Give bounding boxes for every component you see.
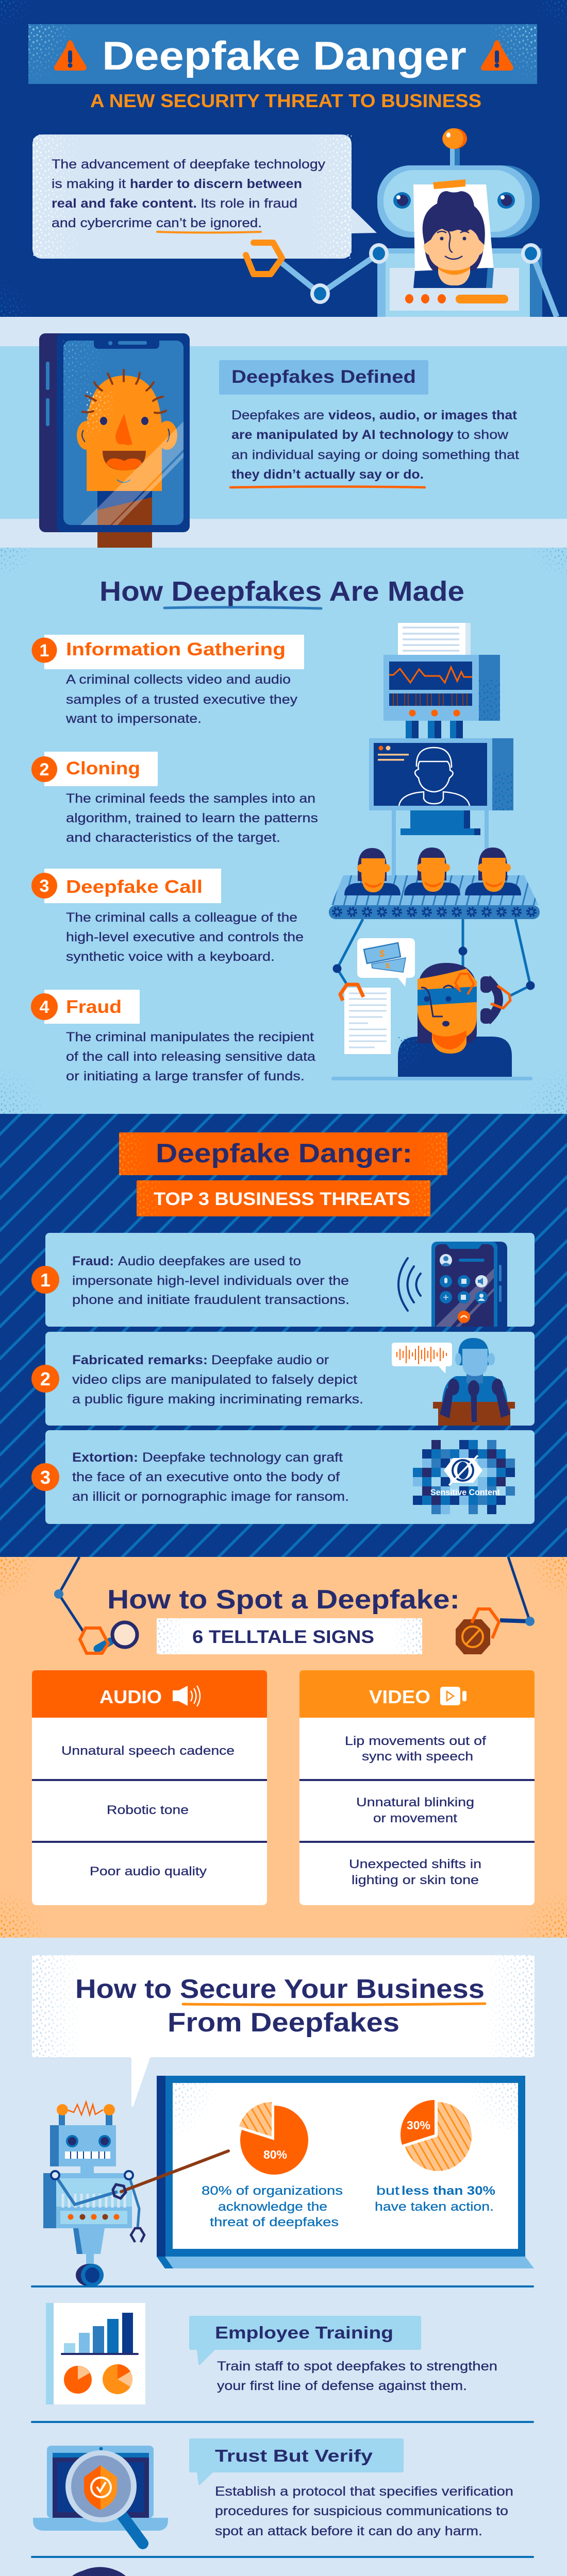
text: definition: to show [457, 428, 509, 442]
step 4: The criminal manipulates the recipient [66, 1030, 314, 1044]
step 2 [31, 752, 318, 845]
threat card: fraud: impersonate high-level individuals over the [72, 1274, 349, 1288]
stop arm [456, 1557, 535, 1654]
monitor with statistics [157, 2076, 534, 2268]
threat card: fraud [31, 1233, 535, 1327]
text: Train staff to spot deepfakes to strengthen [217, 2359, 497, 2374]
text [215, 2484, 513, 2538]
sub-heading box: 6 TELLTALE SIGNS [192, 1627, 374, 1647]
threat card: fabricated remarks: a public figure making incriminating remarks. [72, 1392, 363, 1406]
step 1: A criminal collects video and audio [66, 672, 291, 687]
threat card: extortion: 3 [40, 1467, 51, 1488]
audio header: AUDIO [99, 1686, 162, 1707]
step 1: want to impersonate. [65, 711, 202, 726]
step 1: samples of a trusted executive they [66, 692, 298, 707]
section: top 3 business threats [0, 1114, 567, 1557]
monitor: waveform [383, 655, 500, 721]
cables [406, 721, 463, 738]
text: definition [230, 408, 519, 487]
table: video: Unexpected shifts in [349, 1857, 481, 1871]
icon: censored pixels: Sensitive Content [430, 1487, 500, 1497]
text: definition: are manipulated by AI technology [231, 428, 454, 442]
step 1: 1 [40, 641, 49, 660]
step 4: 4 [40, 997, 49, 1017]
step 4: Fraud [66, 997, 122, 1017]
pie chart: 30 percent [401, 2100, 472, 2171]
item: trust but verify [33, 2438, 513, 2544]
heading: How to Spot a Deepfake: [107, 1585, 460, 1615]
step 1 [32, 635, 304, 726]
threat card: extortion: Deepfake technology can graft [142, 1450, 343, 1465]
cloned head 1 [344, 848, 401, 895]
step 4: of the call into releasing sensitive data [66, 1049, 315, 1064]
threat card: fabricated remarks: video clips are manipulated to falsely depict [72, 1372, 357, 1387]
cloned head 2 [404, 848, 460, 895]
title text: Deepfake Danger [102, 33, 466, 78]
sub-heading box [157, 1618, 422, 1654]
caption: 30 percent: have taken action. [375, 2200, 494, 2214]
threat card: fraud: Fraud: [72, 1254, 114, 1268]
caption: 80 percent: acknowledge the [218, 2200, 327, 2214]
speech bubble intro: harder to discern between [130, 177, 302, 191]
support column [392, 810, 489, 876]
heading bubble [189, 2438, 404, 2485]
section: how deepfakes are made [0, 548, 567, 1114]
caption: 30 percent: but [376, 2184, 399, 2198]
heading speech box: How to Secure Your Business [75, 1974, 485, 2004]
icon: speaker at podium [392, 1338, 515, 1426]
icon: warning triangle right [481, 40, 513, 71]
step 3: high-level executive and controls the [66, 930, 304, 944]
step 4 [31, 990, 315, 1083]
heading banner [119, 1132, 447, 1175]
heading: deepfakes defined: Deepfakes Defined [231, 367, 416, 387]
icon: phone call [398, 1242, 507, 1327]
text: definition: Deepfakes are [231, 408, 324, 422]
caption: 80 percent: 80% of organizations [202, 2184, 343, 2198]
icon: laptop magnifier shield [33, 2446, 168, 2544]
table: audio: Unnatural speech cadence [61, 1744, 235, 1758]
table: video: sync with speech [362, 1750, 473, 1764]
document [340, 985, 391, 1054]
table: video [299, 1670, 535, 1905]
item: automated detection [55, 2567, 531, 2576]
text: Establish a protocol that specifies verification [215, 2484, 513, 2499]
step 3: The criminal calls a colleague of the [66, 910, 297, 925]
step 2: and characteristics of the target. [66, 831, 280, 845]
heading bubble: Employee Training [215, 2323, 393, 2342]
floor [331, 1077, 532, 1080]
heading: deepfakes defined [219, 360, 428, 395]
caption: 80 percent: threat of deepfakes [210, 2215, 339, 2229]
step 3: 3 [40, 876, 49, 896]
text: definition: videos, audio, or images that [328, 408, 518, 422]
caption: 30 percent: less than 30% [402, 2184, 495, 2198]
sub-heading banner: TOP 3 BUSINESS THREATS [154, 1189, 410, 1209]
pie chart: 80 percent: 80% [263, 2148, 287, 2161]
step 2: 2 [40, 760, 49, 779]
magnifier arm [54, 1557, 137, 1653]
table: video: lighting or skin tone [352, 1873, 479, 1887]
text: definition: an individual saying or doing something that [231, 448, 519, 462]
step 1: Information Gathering [66, 639, 286, 659]
table: audio: Robotic tone [107, 1803, 189, 1817]
cloned head 3 [465, 848, 521, 895]
caption: 30 percent [375, 2184, 495, 2214]
heading speech box [32, 1955, 535, 2107]
speech bubble: money: $ [386, 961, 390, 970]
threat card: fraud: 1 [40, 1269, 51, 1291]
video header: VIDEO [369, 1686, 430, 1707]
speech bubble intro: and cybercrime [52, 216, 152, 230]
step 2: The criminal feeds the samples into an [66, 791, 315, 806]
threat card: fabricated remarks: Fabricated remarks: [72, 1353, 208, 1367]
speech bubble: money: $ [379, 948, 385, 959]
speech bubble intro: The advancement of deepfake technology [52, 157, 326, 172]
icon: face scan [55, 2567, 146, 2576]
section: how to spot a deepfake [0, 1557, 567, 1938]
threat card: extortion: Extortion: [72, 1450, 138, 1465]
monitor: face scan [369, 738, 513, 810]
section: hero [0, 0, 567, 317]
table: audio: Poor audio quality [90, 1865, 207, 1878]
subtitle: A NEW SECURITY THREAT TO BUSINESS [90, 90, 481, 111]
sub-heading banner [137, 1180, 430, 1216]
heading speech box: From Deepfakes [168, 2008, 399, 2038]
step 3 [31, 869, 304, 964]
speech bubble: money [357, 938, 415, 987]
speech bubble intro [32, 134, 377, 259]
step 3: Deepfake Call [66, 877, 203, 897]
illustration: presenting robot [43, 2102, 228, 2286]
title banner [28, 24, 537, 84]
threat card: fabricated remarks: Deepfake audio or [211, 1353, 329, 1367]
icon: report [46, 2303, 145, 2404]
heading banner: Deepfake Danger: [156, 1139, 412, 1168]
heading bubble [189, 2316, 421, 2365]
caption: 80 percent [202, 2184, 343, 2229]
table: audio [32, 1670, 267, 1905]
text: procedures for suspicious communications to [215, 2504, 508, 2518]
text: definition: they didn’t actually say or do. [231, 467, 424, 482]
illustration: robot presenter [246, 128, 557, 317]
step 2: algorithm, trained to learn the patterns [66, 811, 318, 825]
victim on the phone [398, 963, 512, 1077]
table: video: Lip movements out of [345, 1734, 486, 1748]
speech bubble intro: Its role in fraud [201, 196, 297, 211]
pie chart: 30 percent: 30% [407, 2119, 430, 2132]
icon: phone with deepfake face [39, 333, 190, 548]
video header [369, 1686, 466, 1707]
step 2: Cloning [66, 758, 140, 778]
icon: censored pixels [413, 1440, 515, 1514]
conveyor belt [329, 875, 540, 919]
pie chart: 80 percent [239, 2102, 308, 2175]
threat card: fabricated remarks: 2 [40, 1368, 51, 1389]
paper output [398, 623, 471, 655]
heading bubble: Trust But Verify [215, 2446, 373, 2465]
icon: warning triangle left [54, 40, 87, 71]
step 4: or initiating a large transfer of funds. [66, 1069, 305, 1083]
threat card: extortion: an illicit or pornographic image for ransom. [72, 1489, 349, 1504]
illustration: deepfake machine [329, 623, 540, 1080]
text: your first line of defense against them. [217, 2379, 467, 2393]
speech bubble intro: can’t be ignored. [156, 216, 262, 230]
threat card: fraud: phone and initiate fraudulent transactions. [72, 1293, 349, 1307]
text: spot an attack before it can do any harm. [215, 2524, 482, 2538]
threat card: extortion: the face of an executive onto the body of [72, 1470, 340, 1484]
audio header [99, 1686, 200, 1707]
step 3: synthetic voice with a keyboard. [66, 950, 275, 964]
threat card: extortion [31, 1430, 535, 1524]
item: employee training [46, 2303, 497, 2404]
speech bubble intro: is making it [52, 177, 126, 191]
text [217, 2359, 497, 2393]
table: video: Unnatural blinking [356, 1795, 474, 1809]
section: secure your business [31, 1955, 535, 2576]
robot arms [334, 919, 533, 996]
section: deepfakes defined [0, 317, 567, 548]
table: video: or movement [373, 1811, 457, 1825]
speech bubble intro: real and fake content. [52, 196, 197, 211]
heading: How Deepfakes Are Made [99, 576, 464, 607]
threat card: fabricated remarks [31, 1332, 535, 1426]
threat card: fraud: Audio deepfakes are used to [118, 1254, 301, 1268]
